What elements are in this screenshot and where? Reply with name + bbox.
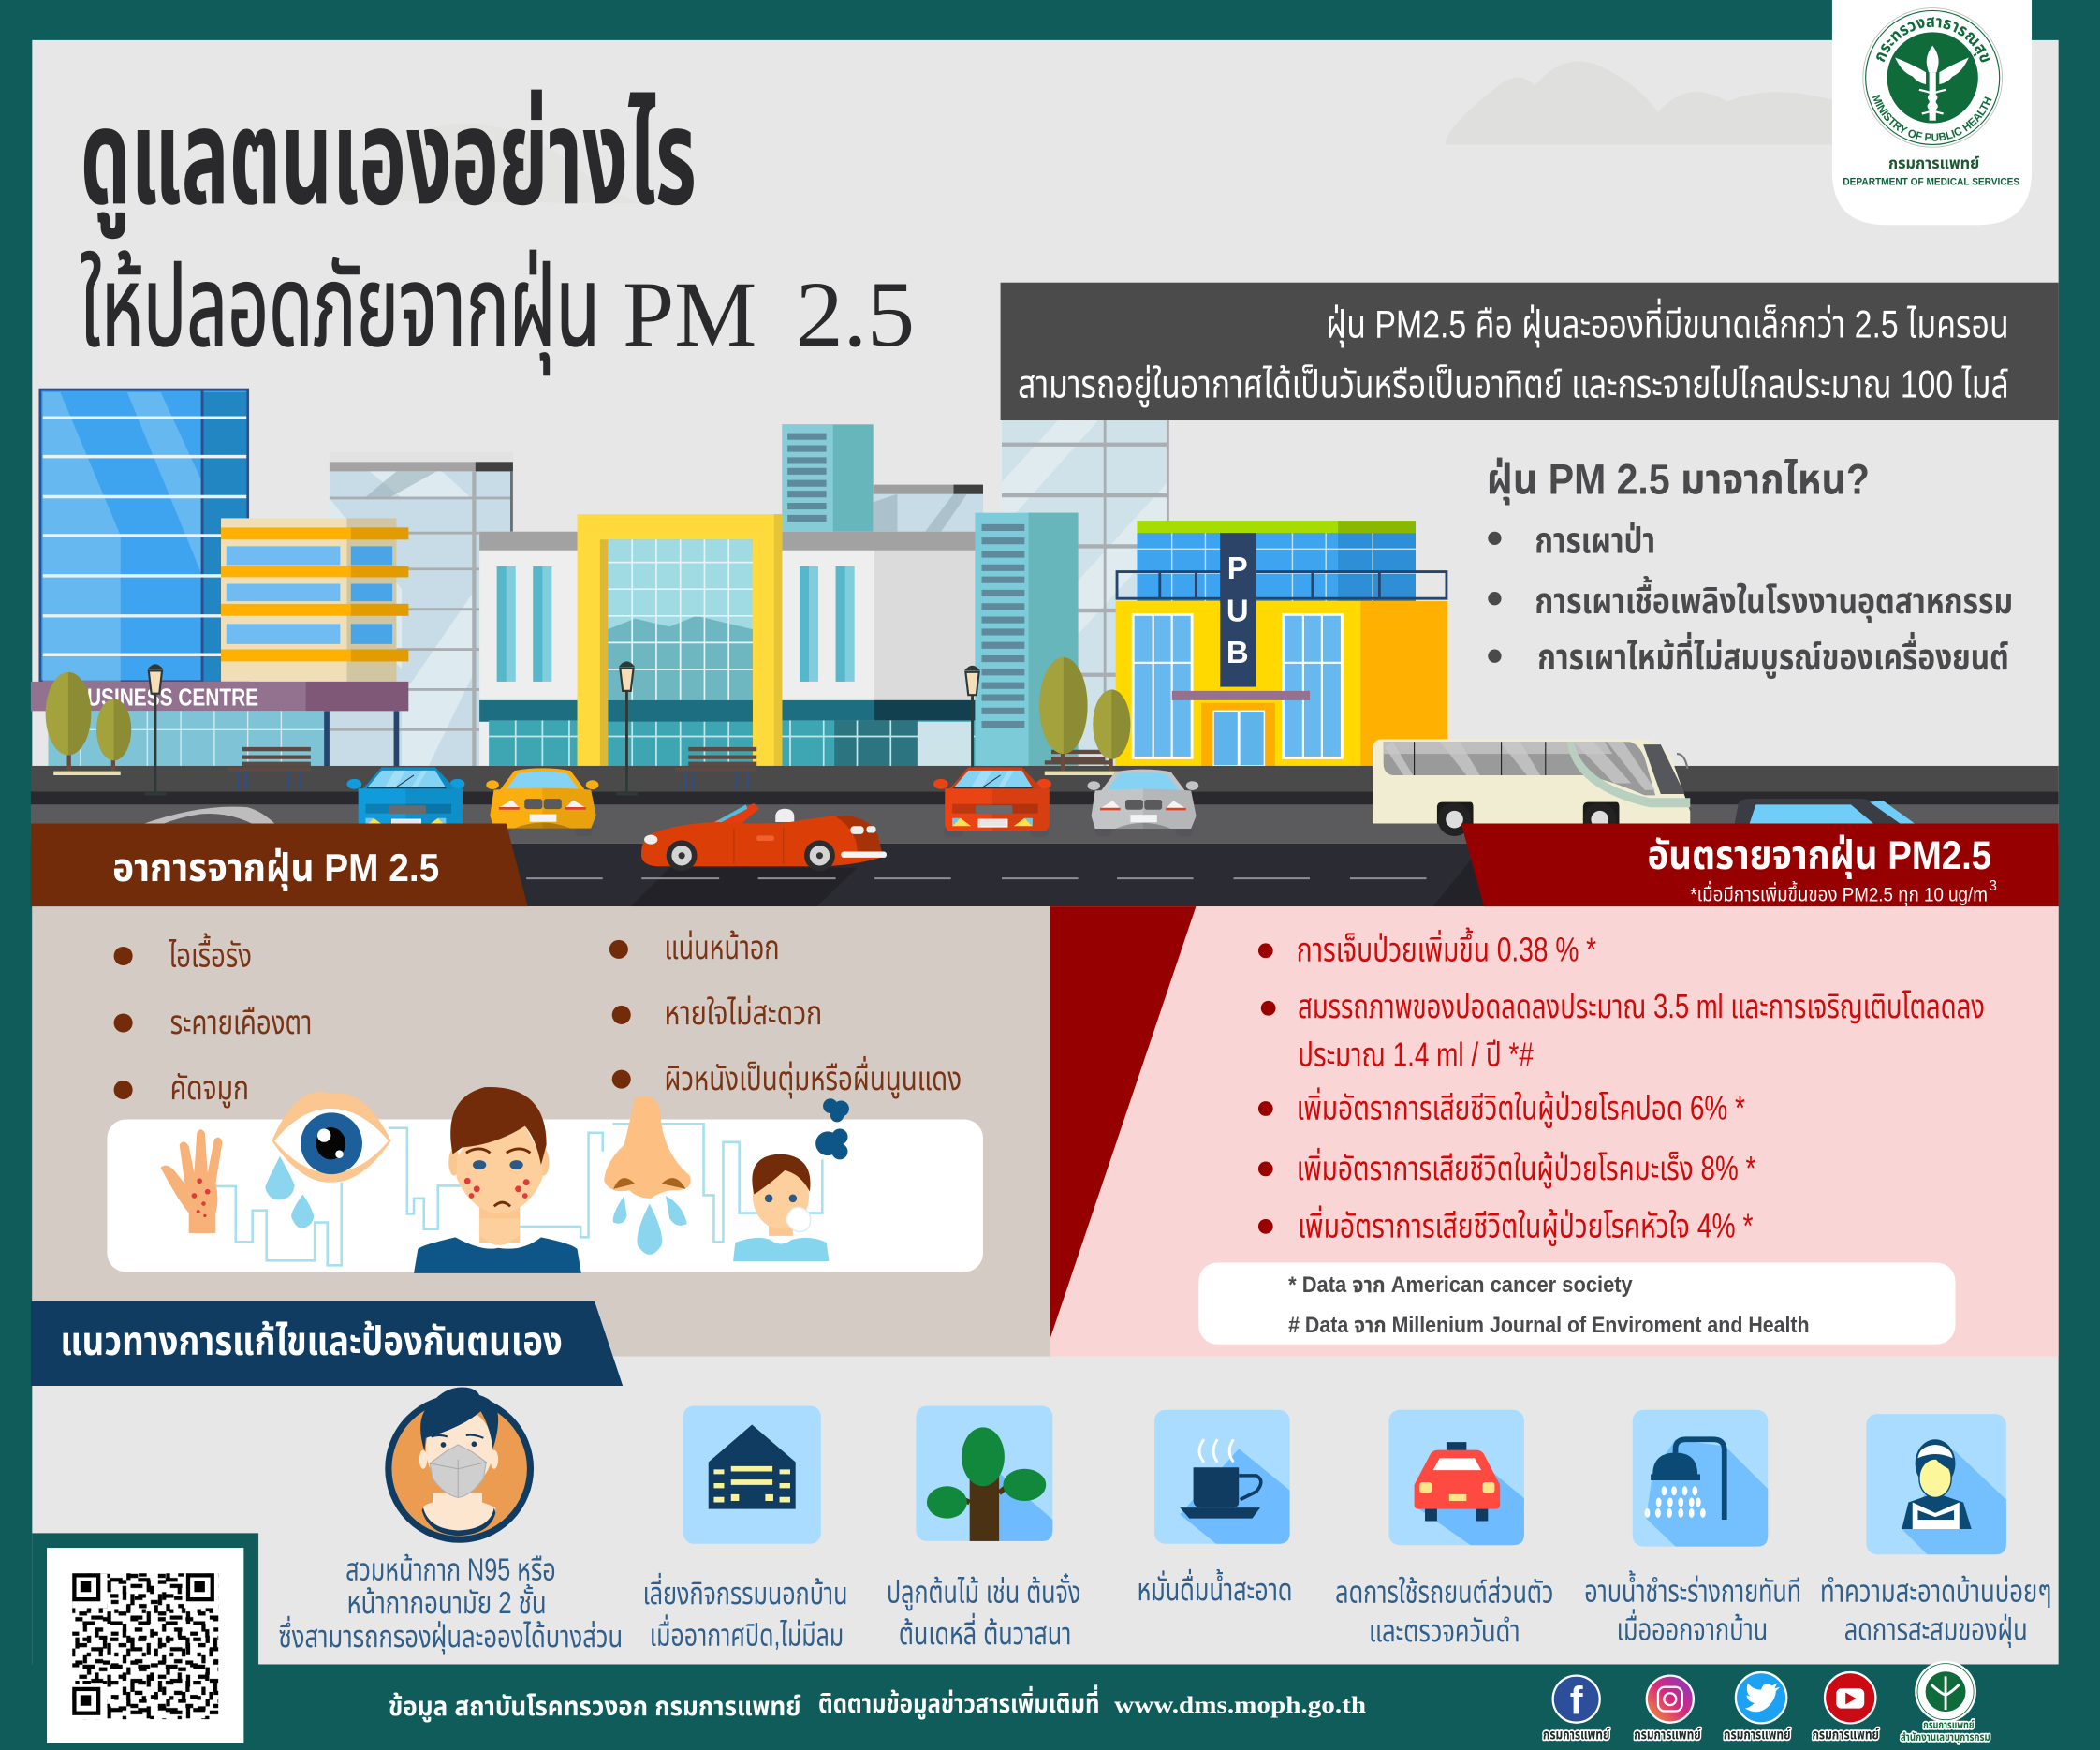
icon: home [683, 1405, 821, 1544]
icon: shower [1633, 1410, 1768, 1547]
heading: dangers [1461, 823, 2059, 906]
logo: department of medical services [1831, 0, 2032, 225]
title: PM [623, 262, 756, 366]
symptoms list: คัดจมูก [170, 1069, 249, 1108]
data source note: * Data จาก American cancer society [1288, 1272, 1633, 1298]
icon: facebook [1553, 1676, 1600, 1723]
building: PUB: U [1226, 594, 1249, 628]
symptoms list: ไอเรื้อรัง [168, 932, 252, 974]
footer credits [389, 1684, 1366, 1723]
prevention captions: สวมหน้ากาก N95 หรือ [345, 1551, 556, 1586]
social labels: สำนักงานเลขานุการกรม [1901, 1731, 1990, 1743]
icon: cleaner [1866, 1414, 2006, 1554]
dangers list: ประมาณ 1.4 ml / ปี *# [1298, 1036, 1534, 1073]
city buildings illustration [31, 390, 1447, 766]
title: ให้ปลอดภัยจากฝุ่น [81, 244, 600, 375]
dangers list: เพิ่มอัตราการเสียชีวิตในผู้ป่วยโรคปอด 6% * [1297, 1087, 1745, 1127]
heading: dangers: 3 [1989, 878, 1997, 894]
icon: eye with tears [265, 1092, 391, 1228]
footer credits: ข้อมูล สถาบันโรคทรวงอก กรมการแพทย์ [389, 1692, 801, 1723]
road [31, 766, 2059, 906]
prevention captions: เลี่ยงกิจกรรมนอกบ้าน [643, 1572, 847, 1610]
heading: symptoms: อาการจากฝุ่น PM 2.5 [112, 846, 439, 891]
sources of PM 2.5: การเผาไหม้ที่ไม่สมบูรณ์ของเครื่องยนต์ [1537, 631, 2009, 679]
purple sign: business centre: USINESS CENTRE [87, 685, 258, 712]
icon: nose with drops [604, 1096, 691, 1255]
logo: department of medical services: กระทรวงสาธารณสุข [1876, 17, 1990, 62]
prevention captions: อาบน้ำชำระร่างกายทันที [1584, 1569, 1801, 1608]
building: cream block [221, 518, 408, 682]
gray car partially hidden [140, 807, 276, 825]
dangers list: เพิ่มอัตราการเสียชีวิตในผู้ป่วยโรคหัวใจ 4% * [1298, 1204, 1754, 1245]
car: red front [933, 767, 1051, 837]
prevention captions [279, 1551, 2052, 1654]
icon: dust clouds [815, 1098, 849, 1159]
icon: ministry seal [1915, 1661, 1976, 1723]
building: teal tower [975, 513, 1079, 766]
sources of PM 2.5: การเผาเชื้อเพลิงในโรงงานอุตสาหกรรม [1535, 575, 2013, 623]
icon: twitter [1736, 1672, 1786, 1723]
building: PUB [1116, 521, 1447, 766]
icon: cup [1154, 1410, 1290, 1544]
definition banner [1001, 283, 2059, 420]
social labels: กรมการแพทย์ [1923, 1718, 1975, 1731]
heading: dangers: อันตรายจากฝุ่น PM2.5 [1647, 833, 1991, 879]
heading: prevention [31, 1301, 623, 1386]
bus [1373, 739, 1690, 836]
sources of PM 2.5 [1487, 456, 2013, 679]
logo: department of medical services: MINISTRY OF PUBLIC HEALTH [1872, 94, 1992, 141]
purple sign: business centre [31, 682, 408, 766]
icon: facebook: f [1570, 1678, 1583, 1722]
building: PUB: P [1227, 551, 1248, 585]
prevention captions: หมั่นดื่มน้ำสะอาด [1137, 1568, 1292, 1607]
car: blue [346, 767, 464, 837]
building: blue tower [40, 390, 248, 682]
heading: prevention: แนวทางการแก้ไขและป้องกันตนเอง [60, 1319, 563, 1364]
building: white mall with yellow frame [479, 514, 983, 766]
building: glass block [330, 452, 513, 766]
car: silver [1088, 770, 1198, 836]
social icons [1543, 1661, 1990, 1743]
social labels: กรมการแพทย์ [1724, 1728, 1791, 1743]
icon: hand with rash [161, 1129, 222, 1233]
symptoms list: ผิวหนังเป็นตุ่มหรือผื่นนูนแดง [665, 1055, 962, 1098]
car: red convertible [641, 803, 887, 871]
social labels: กรมการแพทย์ [1634, 1728, 1701, 1743]
prevention captions: ลดการสะสมของฝุ่น [1844, 1612, 2028, 1648]
heading: symptoms [31, 823, 528, 906]
QR code [47, 1548, 243, 1743]
sources of PM 2.5: ฝุ่น PM 2.5 มาจากไหน? [1487, 456, 1870, 506]
icon: coughing person [733, 1154, 829, 1261]
car: yellow [486, 768, 598, 836]
data source note: # Data จาก Millenium Journal of Enviroment and Health [1288, 1313, 1810, 1338]
prevention captions: เมื่อออกจากบ้าน [1617, 1609, 1768, 1647]
prevention icons [683, 1405, 2006, 1554]
title [81, 83, 915, 375]
logo: department of medical services: DEPARTMENT OF MEDICAL SERVICES [1843, 176, 2019, 187]
icon: tree [916, 1405, 1052, 1541]
panel: symptoms [32, 906, 1050, 1357]
prevention captions: ปลูกต้นไม้ เช่น ต้นจั๋ง [887, 1573, 1080, 1611]
prevention captions: ซึ่งสามารถกรองฝุ่นละอองได้บางส่วน [279, 1615, 623, 1654]
logo: department of medical services: กรมการแพทย์ [1888, 154, 1979, 172]
symptoms list [114, 929, 962, 1108]
icon: youtube [1825, 1672, 1875, 1723]
building: teal back block [782, 424, 983, 535]
icon: car [1388, 1410, 1524, 1545]
dark car partially hidden [1734, 799, 1917, 825]
prevention captions: ลดการใช้รถยนต์ส่วนตัว [1335, 1575, 1553, 1610]
dangers list: เพิ่มอัตราการเสียชีวิตในผู้ป่วยโรคมะเร็ง 8% * [1297, 1147, 1755, 1188]
clouds [361, 61, 1835, 203]
dangers list [1258, 927, 1985, 1245]
dangers list: การเจ็บป่วยเพิ่มขึ้น 0.38 % * [1297, 927, 1596, 969]
footer band [32, 1533, 2059, 1750]
prevention captions: เมื่ออากาศปิด,ไม่มีลม [650, 1613, 844, 1652]
prevention captions: ต้นเดหลี่ ต้นวาสนา [899, 1612, 1071, 1651]
prevention captions: หน้ากากอนามัย 2 ชั้น [346, 1583, 547, 1620]
social labels: กรมการแพทย์ [1543, 1728, 1610, 1743]
heading: dangers: *เมื่อมีการเพิ่มขึ้นของ PM2.5 ทุก 10 ug/m [1690, 880, 1988, 906]
footer credits: ติดตามข้อมูลข่าวสารเพิ่มเติมที่ [818, 1684, 1099, 1720]
symptoms list: หายใจไม่สะดวก [665, 994, 822, 1032]
icon: face with rash [414, 1087, 581, 1273]
data source note [1198, 1262, 1956, 1345]
building: PUB: B [1226, 635, 1249, 669]
symptoms list: ระคายเคืองตา [170, 1004, 312, 1041]
title: 2.5 [796, 262, 915, 366]
red wedge [1050, 906, 1196, 1339]
footer credits: www.dms.moph.go.th [1114, 1691, 1366, 1718]
sources of PM 2.5: การเผาป่า [1535, 522, 1655, 562]
icon: person wearing mask [389, 1387, 530, 1539]
symptoms illustration [107, 1087, 983, 1273]
panel: dangers [1050, 906, 2059, 1357]
icon: instagram [1647, 1676, 1694, 1723]
building: right glass tower [1002, 420, 1167, 766]
symptoms list: แน่นหน้าอก [665, 929, 780, 966]
prevention captions: และตรวจควันดำ [1369, 1613, 1520, 1648]
title: ดูแลตนเองอย่างไร [81, 83, 697, 239]
social labels: กรมการแพทย์ [1812, 1728, 1879, 1743]
trees, lamps and benches [46, 657, 1130, 795]
social labels [1543, 1718, 1990, 1743]
